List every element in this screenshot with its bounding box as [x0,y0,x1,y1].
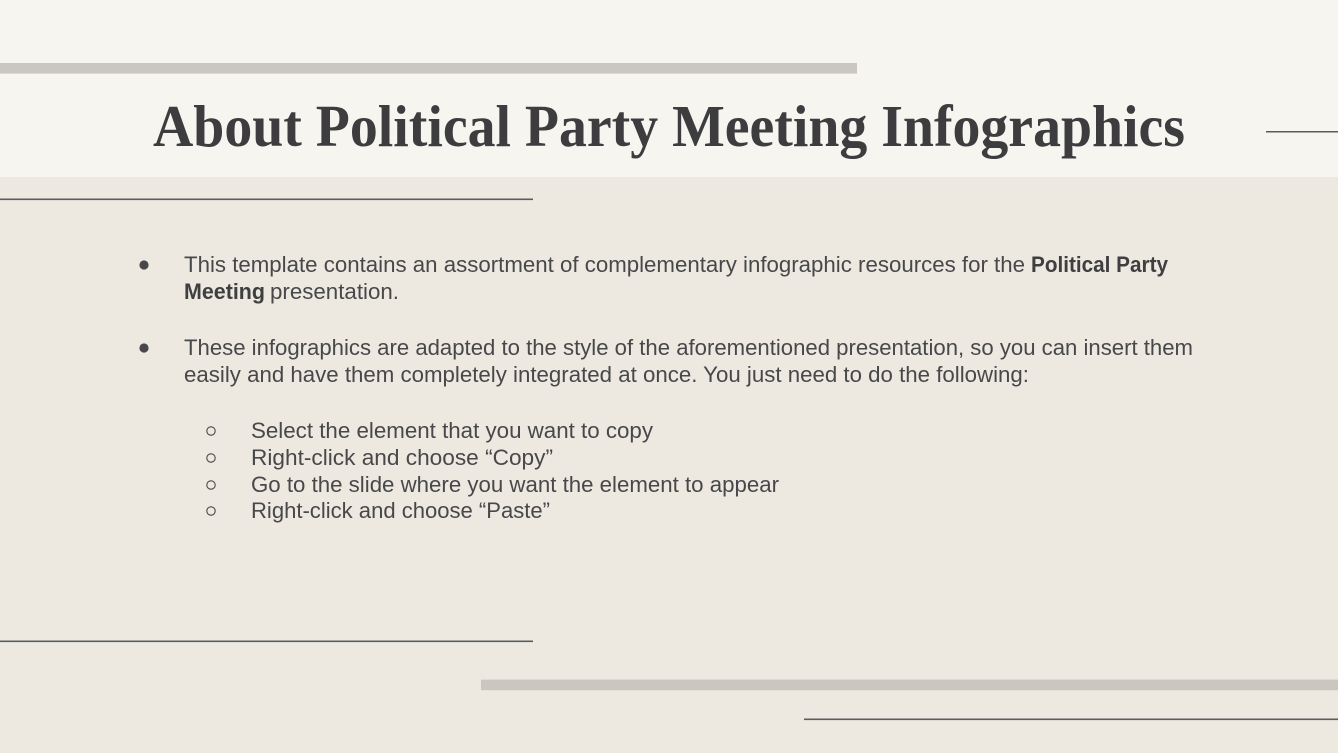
bullet 2 [139,335,1193,387]
top right line [1266,131,1338,132]
bottom thick bar [481,680,1338,690]
bottom right line [804,718,1338,720]
bullet 2: These infographics are adapted to the style of the aforementioned presentation, so you can insert them [184,335,1193,360]
step 2: Right-click and choose “Copy” [251,445,553,470]
lower left line [0,640,533,642]
bullet 2: easily and have them completely integrated at once. You just need to do the following: [184,362,1029,387]
bullet 1: presentation. [270,279,399,304]
upper left line [0,198,533,200]
bullet 1: Meeting [184,279,265,304]
main bullet list [139,252,1193,523]
title: About Political Party Meeting Infographics [153,93,1185,159]
bullet 1 [139,252,1168,304]
step 1: Select the element that you want to copy [251,418,654,443]
bullet 1: Political Party [1031,252,1168,277]
step 3: Go to the slide where you want the element to appear [251,472,779,497]
step 4: Right-click and choose “Paste” [251,498,550,523]
top thick bar [0,63,857,74]
bullet 1: This template contains an assortment of complementary infographic resources for the [184,252,1025,277]
sub-steps list [207,418,779,523]
header band [0,0,1338,177]
